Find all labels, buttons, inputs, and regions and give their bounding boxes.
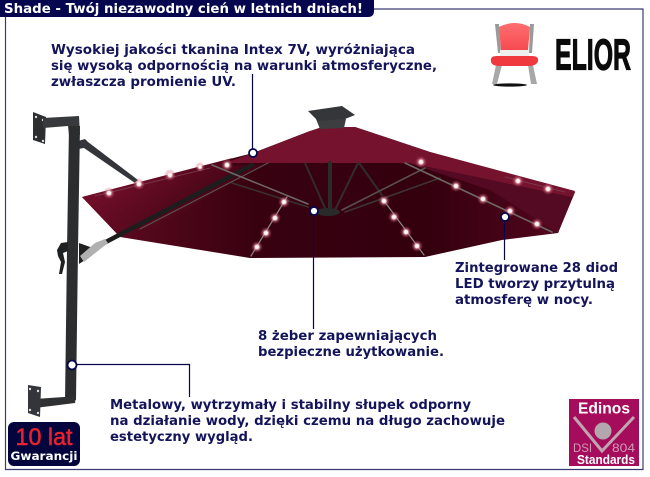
callout line: LED <box>501 213 509 260</box>
text: LED: LED tworzy przytulną <box>455 277 615 292</box>
vertical pole <box>65 126 80 402</box>
text: fabric: Wysokiej jakości tkanina Intex 7V, wyróżniająca <box>51 43 415 58</box>
canopy top band <box>225 127 575 197</box>
upper strut <box>78 139 138 183</box>
callout line: pole <box>68 360 190 397</box>
right canopy panel <box>405 162 575 233</box>
badge: Edinos Standards <box>569 399 639 467</box>
text: LED: atmosferę w nocy. <box>455 293 593 308</box>
badge: 10 lat warranty <box>8 422 80 466</box>
crank handle <box>57 242 68 274</box>
upper arm <box>43 116 80 135</box>
badge: Edinos Standards: Standards <box>577 453 635 467</box>
text: ribs <box>258 329 444 360</box>
badge: Edinos Standards: 804 <box>612 441 635 455</box>
lower arm <box>35 396 76 408</box>
wall mount pole <box>28 112 138 417</box>
hub <box>316 208 340 216</box>
text: pole: Metalowy, wytrzymały i stabilny słupek odporny <box>110 398 472 413</box>
ribs <box>95 163 565 256</box>
text: ribs: bezpieczne użytkowanie. <box>258 345 444 360</box>
upper wall plate <box>33 112 46 144</box>
text: LED: Zintegrowane 28 diod <box>455 261 618 276</box>
left canopy panel <box>82 158 262 237</box>
text: pole: na działanie wody, dzięki czemu na długo zachowuje <box>110 414 505 429</box>
callout line: ribs <box>310 207 318 329</box>
text: pole <box>110 398 505 445</box>
title bar: Shade - Twój niezawodny cień w letnich dniach! <box>4 2 363 17</box>
canopy underside <box>82 127 575 258</box>
text: fabric: zwłaszcza promienie UV. <box>51 75 236 90</box>
callout line: fabric <box>249 74 257 157</box>
badge: 10 lat warranty: Gwarancji <box>10 449 78 463</box>
strut hinge <box>80 239 108 262</box>
solar panel top <box>316 119 346 129</box>
text: ribs: 8 żeber zapewniających <box>258 329 437 344</box>
LED lights <box>103 156 554 253</box>
badge: Edinos Standards: DSI <box>573 441 592 455</box>
umbrella <box>80 106 575 262</box>
icon: chair <box>491 23 538 87</box>
text: LED <box>455 261 618 308</box>
text: fabric <box>51 43 437 90</box>
text: fabric: się wysoką odpornością na warunki atmosferyczne, <box>51 59 437 74</box>
lower wall plate <box>28 385 41 417</box>
badge: Edinos Standards: Edinos <box>578 400 630 418</box>
text: pole: estetyczny wygląd. <box>110 430 253 445</box>
logo: ELIOR <box>491 23 631 87</box>
badge: 10 lat warranty: 10 lat <box>16 424 73 451</box>
